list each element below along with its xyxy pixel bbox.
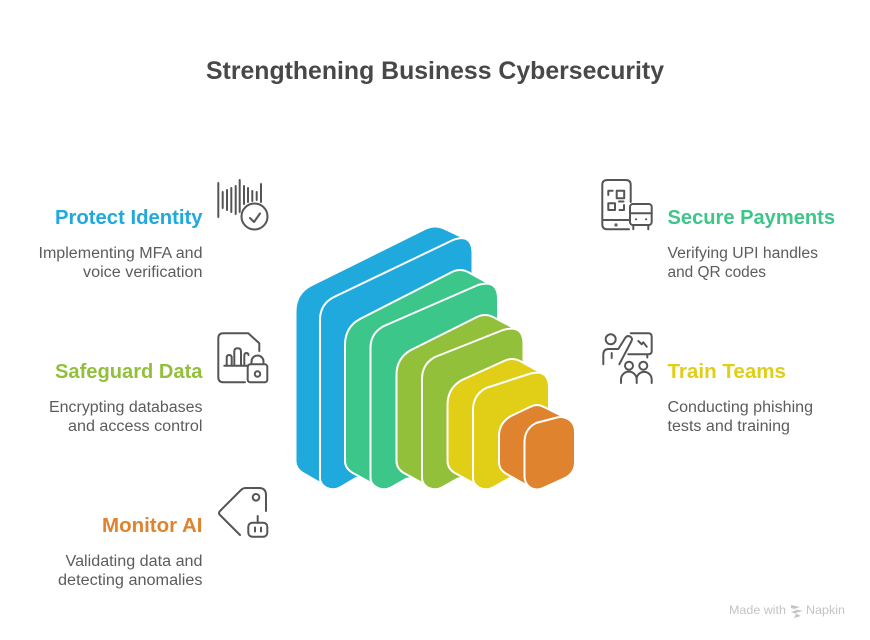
heading: Safeguard Data: Safeguard Data — [55, 361, 203, 383]
footer: Made with Napkin: Made with — [729, 605, 786, 617]
block: Monitor AI — [58, 488, 267, 589]
layer: olive (Safeguard Data) — [396, 315, 524, 489]
description: Monitor AI: detecting anomalies — [58, 572, 203, 589]
heading: Monitor AI: Monitor AI — [102, 515, 202, 537]
description: Train Teams: tests and training — [668, 418, 790, 435]
description: Safeguard Data: Encrypting databases — [49, 399, 203, 416]
layer: blue (Protect Identity) — [296, 226, 472, 489]
description: Safeguard Data: and access control — [68, 418, 202, 435]
heading: Train Teams: Train Teams — [668, 361, 786, 383]
footer: Made with Napkin — [729, 605, 845, 618]
icon: document chart with lock — [218, 333, 267, 382]
description: Secure Payments: and QR codes — [668, 264, 766, 281]
footer: Made with Napkin: Napkin — [806, 605, 845, 617]
description: Train Teams — [668, 399, 813, 435]
nested layered blocks diagram — [296, 226, 575, 490]
layer: orange (Monitor AI) — [499, 405, 575, 490]
description: Protect Identity: voice verification — [83, 264, 202, 281]
heading: Protect Identity: Protect Identity — [55, 207, 203, 229]
description: Secure Payments — [668, 245, 818, 281]
title: Strengthening Business Cybersecurity — [206, 57, 664, 85]
block: Train Teams — [603, 333, 813, 435]
description: Secure Payments: Verifying UPI handles — [668, 245, 818, 262]
block: Secure Payments — [602, 180, 835, 281]
description: Protect Identity: Implementing MFA and — [38, 245, 202, 262]
description: Monitor AI: Validating data and — [66, 553, 202, 570]
icon: trainer at board with audience — [603, 333, 652, 383]
description: Monitor AI — [58, 553, 203, 589]
description: Train Teams: Conducting phishing — [668, 399, 813, 416]
description: Safeguard Data — [49, 399, 203, 435]
block: Safeguard Data — [49, 333, 267, 435]
block: Protect Identity — [38, 180, 268, 281]
icon: Napkin logo — [791, 605, 803, 618]
heading: Secure Payments: Secure Payments — [668, 207, 835, 229]
icon: phone QR code with bus — [602, 180, 652, 229]
layer: green (Secure Payments) — [345, 270, 498, 489]
layer: yellow (Train Teams) — [448, 359, 549, 489]
icon: tag with robot — [219, 488, 267, 537]
description: Protect Identity — [38, 245, 202, 281]
icon: voice waveform with check — [218, 180, 268, 230]
